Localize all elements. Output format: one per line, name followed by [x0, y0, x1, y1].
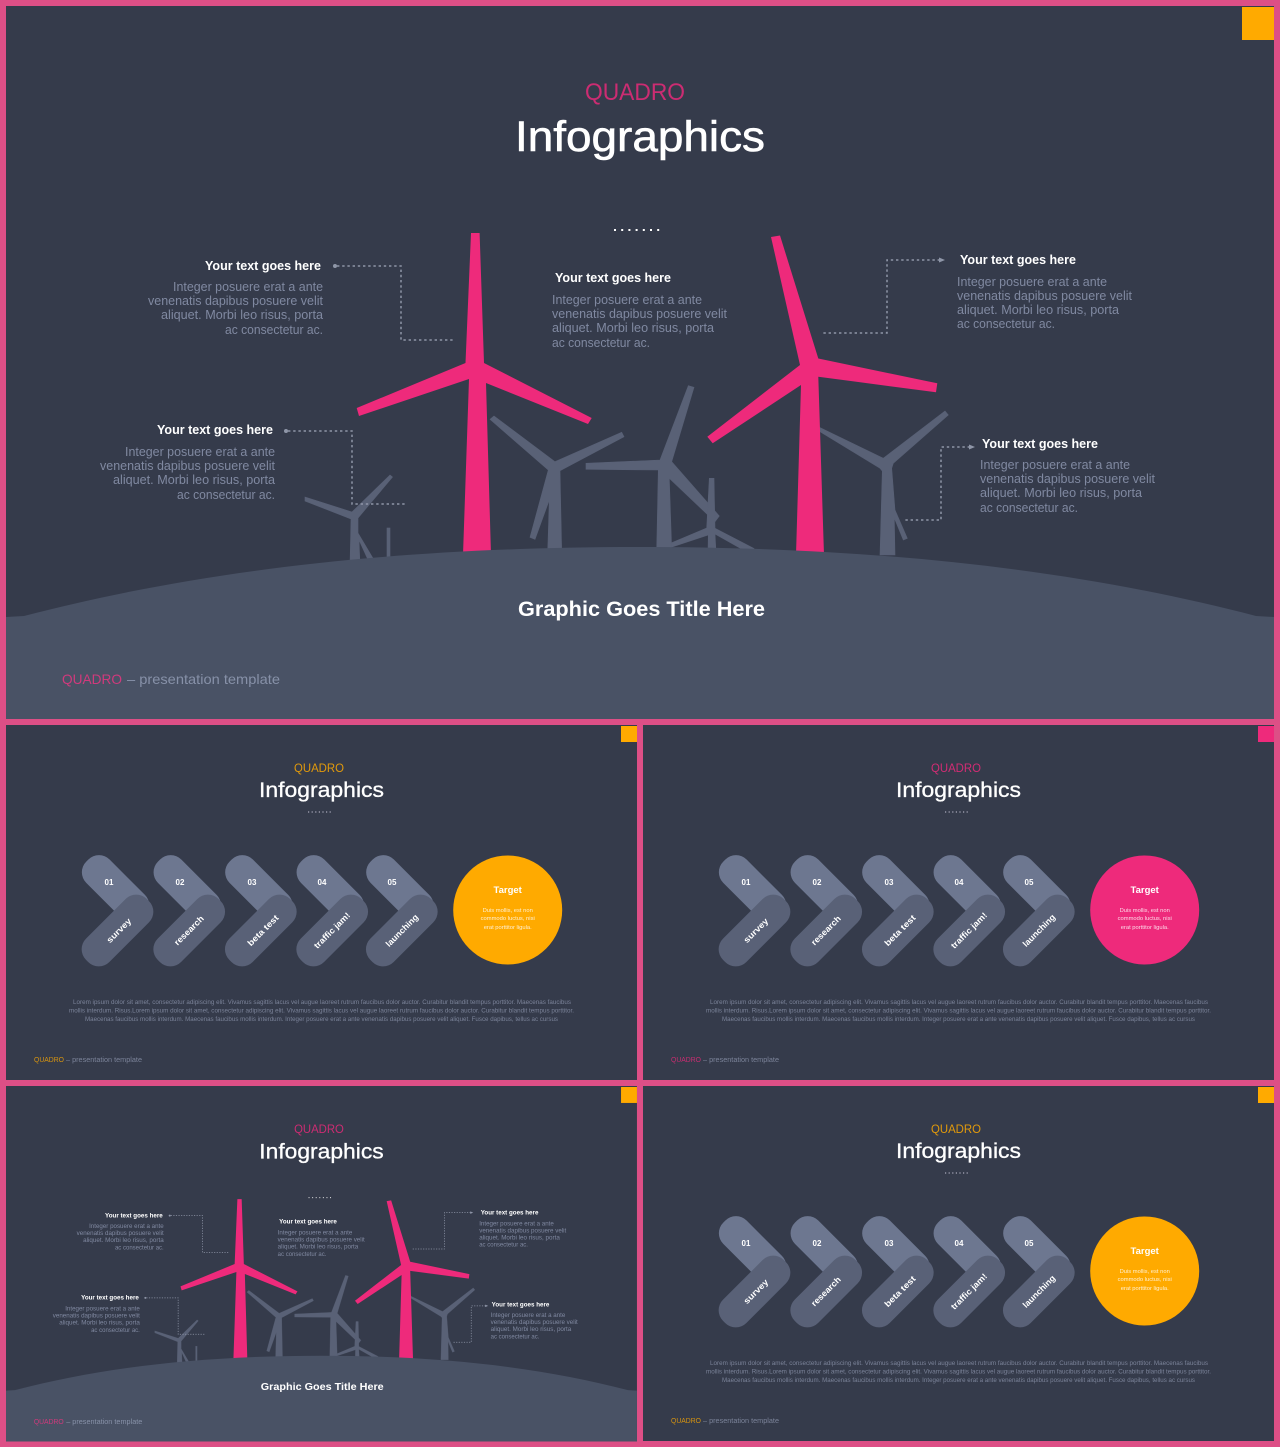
text block: lower left — [53, 1294, 140, 1334]
text block: centre: ac consectetur ac. — [552, 336, 650, 350]
grey turbines — [305, 386, 948, 565]
chevron steps: 05 — [388, 878, 397, 887]
chevron steps: 04 — [955, 878, 964, 887]
brand label: QUADRO — [931, 761, 981, 775]
body text: mollis interdum. Risus.Lorem ipsum dolor sit amet, consectetur adipiscing elit. Vivamus sagittis lacus vel augue laoreet rutrum faucibus dolor auctor. Curabitur blandit tempus porttitor. — [706, 1008, 1211, 1014]
text block: centre: Integer posuere erat a ante — [552, 293, 702, 307]
footer: QUADRO — [671, 1418, 702, 1425]
chevron steps: launching — [1020, 1273, 1057, 1310]
text block: top left: Integer posuere erat a ante — [89, 1223, 164, 1230]
footer: – presentation template — [66, 1419, 142, 1426]
chevron steps: 03 — [248, 878, 257, 887]
text block: top right — [479, 1210, 567, 1249]
target circle: erat porttitor ligula. — [484, 925, 532, 931]
footer: QUADRO — [62, 671, 122, 687]
text block: top left: Your text goes here — [205, 259, 321, 273]
corner square — [621, 1087, 637, 1103]
text block: top left: venenatis dapibus posuere velit — [77, 1230, 164, 1237]
graphic title: Graphic Goes Title Here — [518, 598, 765, 621]
text block: top right: aliquet. Morbi leo risus, porta — [479, 1235, 560, 1242]
corner square — [1242, 7, 1274, 40]
text block: lower left: Your text goes here — [81, 1294, 139, 1301]
hill — [6, 1356, 637, 1442]
footer: QUADRO — [34, 1419, 64, 1426]
text block: top left: aliquet. Morbi leo risus, porta — [83, 1237, 164, 1244]
footer: – presentation template — [66, 1057, 142, 1064]
chevron steps: 01 — [742, 1239, 751, 1248]
title: Infographics — [259, 778, 384, 802]
text block: top right: ac consectetur ac. — [479, 1242, 528, 1249]
text block: top right: ac consectetur ac. — [957, 317, 1055, 331]
pink turbine right — [707, 236, 937, 555]
panel: process slide orange top left — [6, 725, 637, 1080]
text block: top left: Your text goes here — [105, 1213, 163, 1220]
panel: process slide orange bottom right — [643, 1086, 1274, 1441]
text block: top left: venenatis dapibus posuere velit — [148, 294, 324, 308]
text block: top left: Integer posuere erat a ante — [173, 280, 323, 294]
text block: lower right: ac consectetur ac. — [491, 1333, 540, 1340]
target circle: commodo luctus, nisi — [1118, 916, 1172, 922]
chevron steps: traffic jam! — [949, 1271, 989, 1312]
text block: top right: Integer posuere erat a ante — [957, 275, 1107, 289]
text block: lower left: aliquet. Morbi leo risus, porta — [59, 1319, 140, 1326]
chevron steps: launching — [1020, 912, 1057, 949]
text block: lower right: Integer posuere erat a ante — [491, 1312, 566, 1319]
text block: lower right: venenatis dapibus posuere velit — [980, 472, 1156, 486]
target circle: commodo luctus, nisi — [1118, 1277, 1172, 1283]
chevron steps: 04 — [955, 1239, 964, 1248]
target circle: erat porttitor ligula. — [1121, 1286, 1169, 1292]
text block: lower right — [980, 437, 1156, 515]
text block: lower left: ac consectetur ac. — [177, 488, 275, 502]
dotted separator — [309, 1197, 332, 1199]
text block: centre: venenatis dapibus posuere velit — [552, 307, 728, 321]
panel: small wind turbine slide — [6, 1086, 637, 1442]
chevron steps: 05 — [1025, 878, 1034, 887]
chevron steps: 04 — [318, 878, 327, 887]
text block: top right: Your text goes here — [481, 1210, 539, 1217]
target circle: Target — [1131, 1246, 1160, 1257]
footer — [34, 1057, 142, 1064]
text block: lower left: aliquet. Morbi leo risus, porta — [113, 473, 275, 487]
pink turbine left — [357, 233, 592, 555]
target circle — [1090, 856, 1199, 964]
callout lines — [144, 1211, 488, 1342]
text block: lower left: Your text goes here — [157, 423, 273, 437]
chevron steps: traffic jam! — [312, 910, 352, 951]
text block: lower right: Your text goes here — [492, 1301, 550, 1308]
panel: process slide pink top right — [643, 725, 1274, 1080]
title: Infographics — [896, 778, 1021, 802]
body text: mollis interdum. Risus.Lorem ipsum dolor sit amet, consectetur adipiscing elit. Vivamus sagittis lacus vel augue laoreet rutrum faucibus dolor auctor. Curabitur blandit tempus porttitor. — [706, 1370, 1211, 1376]
target circle: Target — [1131, 885, 1160, 896]
footer: – presentation template — [703, 1418, 779, 1425]
chevron steps: 01 — [105, 878, 114, 887]
grey turbines — [155, 1275, 475, 1365]
hill — [6, 547, 1274, 719]
target circle: Duis mollis, est non — [1120, 908, 1170, 914]
brand label: QUADRO — [294, 1122, 344, 1136]
chevron steps: beta test — [882, 1274, 918, 1309]
target circle — [1090, 1216, 1199, 1326]
text block: centre — [278, 1219, 365, 1258]
corner square — [621, 726, 637, 742]
chevron steps: 02 — [176, 878, 185, 887]
target circle — [453, 856, 562, 964]
text block: lower right: ac consectetur ac. — [980, 501, 1078, 515]
text block: top right: venenatis dapibus posuere velit — [957, 289, 1133, 303]
chevron steps — [712, 1210, 1081, 1334]
text block: top right: Integer posuere erat a ante — [479, 1221, 554, 1228]
text block: top left: ac consectetur ac. — [225, 323, 323, 337]
body text: Lorem ipsum dolor sit amet, consectetur adipiscing elit. Vivamus sagittis lacus vel augue laoreet rutrum faucibus dolor auctor. Curabitur blandit tempus porttitor. Maecenas faucibus — [710, 1361, 1208, 1367]
callout lines — [284, 258, 975, 520]
target circle: Duis mollis, est non — [1120, 1269, 1170, 1275]
dotted separator — [945, 811, 969, 813]
corner square — [1258, 726, 1274, 742]
chevron steps: research — [172, 913, 206, 947]
target circle: commodo luctus, nisi — [481, 916, 535, 922]
footer: – presentation template — [703, 1057, 779, 1064]
text block: lower left: venenatis dapibus posuere velit — [100, 459, 276, 473]
text block: top right — [957, 253, 1133, 331]
graphic title: Graphic Goes Title Here — [261, 1382, 384, 1393]
dotted separator — [308, 811, 332, 813]
panel: main wind turbine slide — [6, 6, 1274, 719]
body text: Maecenas faucibus mollis interdum. Maecenas faucibus mollis interdum. Integer posuere erat a ante venenatis dapibus posuere velit aliquet. Fusce dapibus, tellus ac cursus — [85, 1017, 558, 1023]
text block: centre: Integer posuere erat a ante — [278, 1230, 353, 1237]
text block: top right: Your text goes here — [960, 253, 1076, 267]
text block: centre: venenatis dapibus posuere velit — [278, 1237, 365, 1244]
chevron steps: 02 — [813, 1239, 822, 1248]
pink turbine right — [355, 1200, 469, 1360]
chevron steps: 03 — [885, 878, 894, 887]
brand label: QUADRO — [585, 79, 685, 106]
body text: Lorem ipsum dolor sit amet, consectetur adipiscing elit. Vivamus sagittis lacus vel augue laoreet rutrum faucibus dolor auctor. Curabitur blandit tempus porttitor. Maecenas faucibus — [73, 1000, 571, 1006]
text block: top left — [148, 259, 324, 337]
footer — [671, 1418, 779, 1425]
chevron steps — [75, 849, 444, 973]
title: Infographics — [259, 1139, 384, 1163]
text block: lower right — [491, 1301, 578, 1340]
text block: top right: venenatis dapibus posuere velit — [479, 1228, 567, 1235]
text block: top left — [77, 1213, 164, 1252]
body text: Lorem ipsum dolor sit amet, consectetur adipiscing elit. Vivamus sagittis lacus vel augue laoreet rutrum faucibus dolor auctor. Curabitur blandit tempus porttitor. Maecenas faucibus — [710, 1000, 1208, 1006]
dotted separator — [614, 229, 662, 231]
dotted separator — [945, 1172, 969, 1174]
body text: mollis interdum. Risus.Lorem ipsum dolor sit amet, consectetur adipiscing elit. Vivamus sagittis lacus vel augue laoreet rutrum faucibus dolor auctor. Curabitur blandit tempus porttitor. — [69, 1008, 574, 1014]
body text: Maecenas faucibus mollis interdum. Maecenas faucibus mollis interdum. Integer posuere erat a ante venenatis dapibus posuere velit aliquet. Fusce dapibus, tellus ac cursus — [722, 1378, 1195, 1384]
footer — [62, 671, 280, 687]
chevron steps: 01 — [742, 878, 751, 887]
body text — [706, 1361, 1211, 1384]
text block: top left: ac consectetur ac. — [115, 1245, 164, 1252]
text block: centre: ac consectetur ac. — [278, 1251, 327, 1258]
pink turbine left — [181, 1199, 297, 1360]
chevron steps: traffic jam! — [949, 910, 989, 951]
footer: QUADRO — [34, 1057, 65, 1064]
text block: lower left: Integer posuere erat a ante — [65, 1305, 140, 1312]
chevron steps: research — [809, 1274, 843, 1308]
chevron steps: beta test — [882, 913, 918, 948]
text block: centre: aliquet. Morbi leo risus, porta — [278, 1244, 359, 1251]
text block: lower left: ac consectetur ac. — [91, 1327, 140, 1334]
text block: lower right: aliquet. Morbi leo risus, porta — [980, 486, 1142, 500]
chevron steps: survey — [104, 916, 134, 945]
title: Infographics — [515, 113, 765, 161]
text block: lower left — [100, 423, 276, 502]
text block: lower right: venenatis dapibus posuere velit — [491, 1319, 578, 1326]
text block: top left: aliquet. Morbi leo risus, porta — [161, 308, 323, 322]
footer: – presentation template — [127, 671, 280, 687]
target circle: Duis mollis, est non — [483, 908, 533, 914]
text block: lower left: Integer posuere erat a ante — [125, 445, 275, 459]
footer — [671, 1057, 779, 1064]
text block: centre: aliquet. Morbi leo risus, porta — [552, 321, 714, 335]
chevron steps: survey — [741, 916, 771, 945]
chevron steps: launching — [383, 912, 420, 949]
body text — [69, 1000, 574, 1023]
chevron steps: survey — [741, 1277, 771, 1306]
text block: lower right: aliquet. Morbi leo risus, porta — [491, 1326, 572, 1333]
text block: centre: Your text goes here — [279, 1219, 337, 1226]
target circle: erat porttitor ligula. — [1121, 925, 1169, 931]
chevron steps — [712, 849, 1081, 973]
chevron steps: research — [809, 913, 843, 947]
chevron steps: 03 — [885, 1239, 894, 1248]
chevron steps: 02 — [813, 878, 822, 887]
text block: centre: Your text goes here — [555, 271, 671, 285]
footer: QUADRO — [671, 1057, 702, 1064]
body text: Maecenas faucibus mollis interdum. Maecenas faucibus mollis interdum. Integer posuere erat a ante venenatis dapibus posuere velit aliquet. Fusce dapibus, tellus ac cursus — [722, 1017, 1195, 1023]
text block: lower right: Your text goes here — [982, 437, 1098, 451]
text block: lower right: Integer posuere erat a ante — [980, 458, 1130, 472]
body text — [706, 1000, 1211, 1023]
text block: top right: aliquet. Morbi leo risus, porta — [957, 303, 1119, 317]
brand label: QUADRO — [931, 1122, 981, 1136]
corner square — [1258, 1087, 1274, 1103]
chevron steps: beta test — [245, 913, 281, 948]
brand label: QUADRO — [294, 761, 344, 775]
title: Infographics — [896, 1139, 1021, 1163]
target circle: Target — [494, 885, 523, 896]
text block: lower left: venenatis dapibus posuere velit — [53, 1312, 140, 1319]
text block: centre — [552, 271, 728, 350]
footer — [34, 1419, 142, 1426]
chevron steps: 05 — [1025, 1239, 1034, 1248]
